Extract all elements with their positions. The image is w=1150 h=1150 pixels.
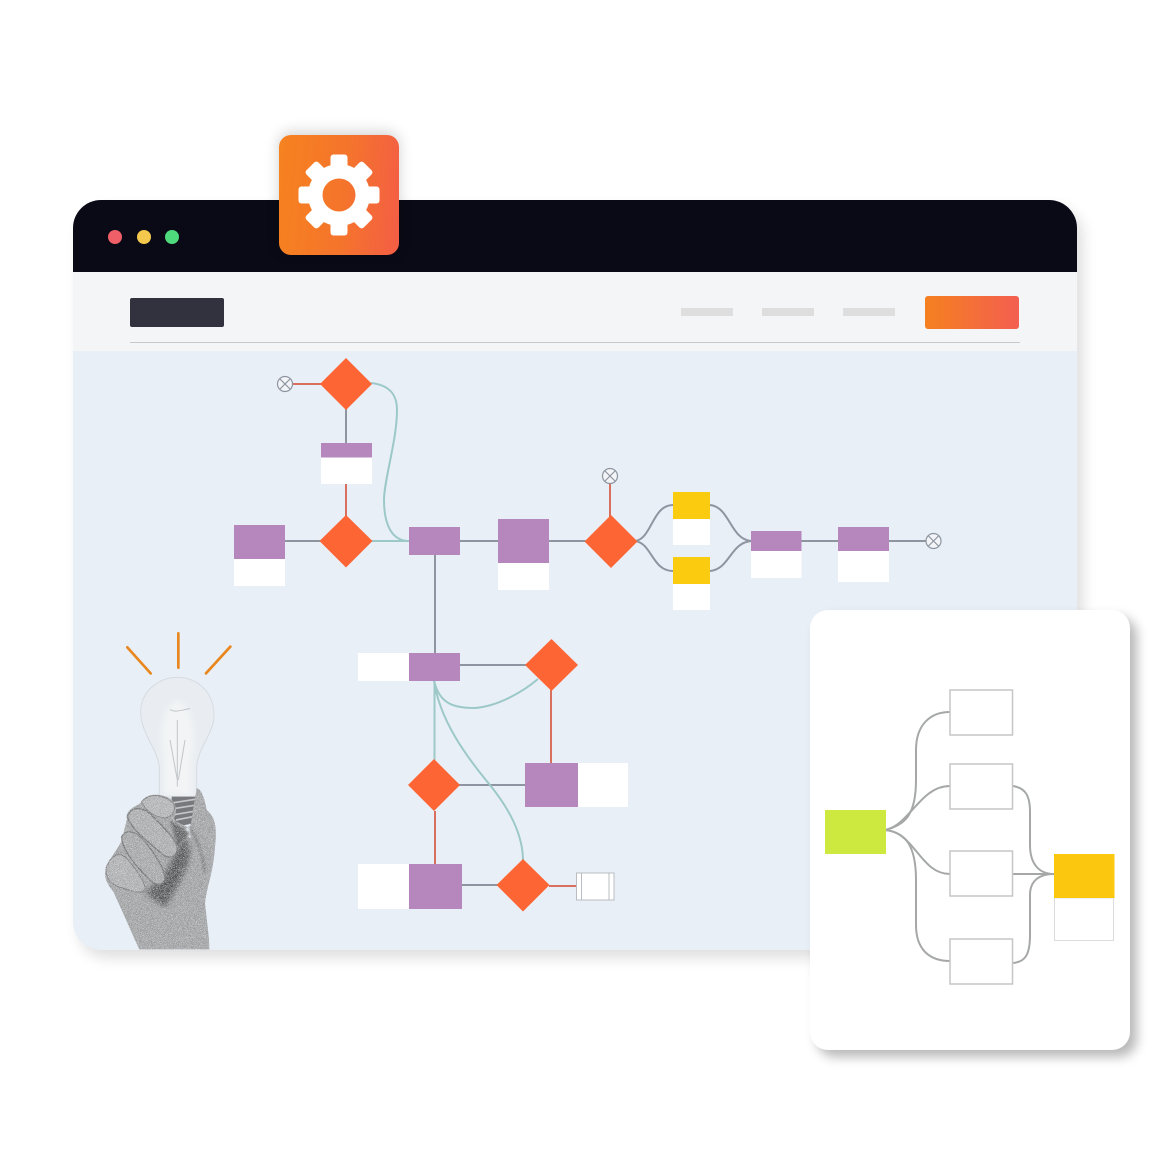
- glass bulb: [141, 677, 214, 797]
- diamond: centre decision: [584, 515, 638, 568]
- card: centre junction: [409, 527, 460, 555]
- card: far left: [234, 525, 285, 586]
- navigation bar: [73, 272, 1077, 351]
- mini box 3: [950, 851, 1012, 896]
- card: before centre decision: [498, 519, 549, 590]
- nav item 3: [843, 308, 895, 316]
- nav item 2: [762, 308, 814, 316]
- card: lower middle row: [525, 763, 628, 807]
- red window dot: [108, 230, 122, 244]
- light rays: [127, 633, 230, 673]
- card: right one: [751, 531, 802, 578]
- nav button: [925, 296, 1019, 329]
- diamond: left decision: [320, 515, 372, 568]
- green window dot: [165, 230, 179, 244]
- icon: gear: [298, 154, 380, 236]
- side panel: mini flowchart: [810, 610, 1130, 1050]
- card: yellow top: [673, 492, 710, 545]
- hand: [105, 788, 216, 949]
- mini box 2: [950, 764, 1012, 809]
- mini flowchart drawing: [825, 689, 1114, 985]
- window title bar: [73, 200, 1077, 272]
- diamond: lower right decision: [525, 639, 578, 691]
- subprocess box: [576, 873, 614, 900]
- end marker: top centre: [602, 468, 618, 484]
- end marker: top left: [278, 376, 292, 392]
- icon: gear badge: [279, 135, 399, 255]
- mini start node: [825, 810, 886, 854]
- card: upper stacked: [321, 443, 372, 484]
- screw base: [172, 797, 196, 826]
- mini end node: [1054, 854, 1114, 940]
- card: right two: [838, 527, 889, 582]
- card: yellow bottom: [673, 557, 710, 610]
- mini box 1: [950, 690, 1012, 735]
- nav item 1: [681, 308, 733, 316]
- logo placeholder: [130, 298, 224, 327]
- browser window: [73, 200, 1077, 950]
- yellow window dot: [137, 230, 151, 244]
- diamond: bottom decision: [496, 859, 550, 912]
- mini connectors: [885, 712, 1054, 963]
- diamond: lower left decision: [408, 759, 460, 811]
- mini box 4: [950, 939, 1012, 984]
- end marker: right: [926, 534, 941, 548]
- diamond: top decision: [320, 358, 372, 410]
- nav underline: [130, 342, 1020, 343]
- card: lower upper row: [358, 653, 460, 681]
- connectors: [285, 383, 926, 886]
- card: lower bottom row: [358, 864, 462, 909]
